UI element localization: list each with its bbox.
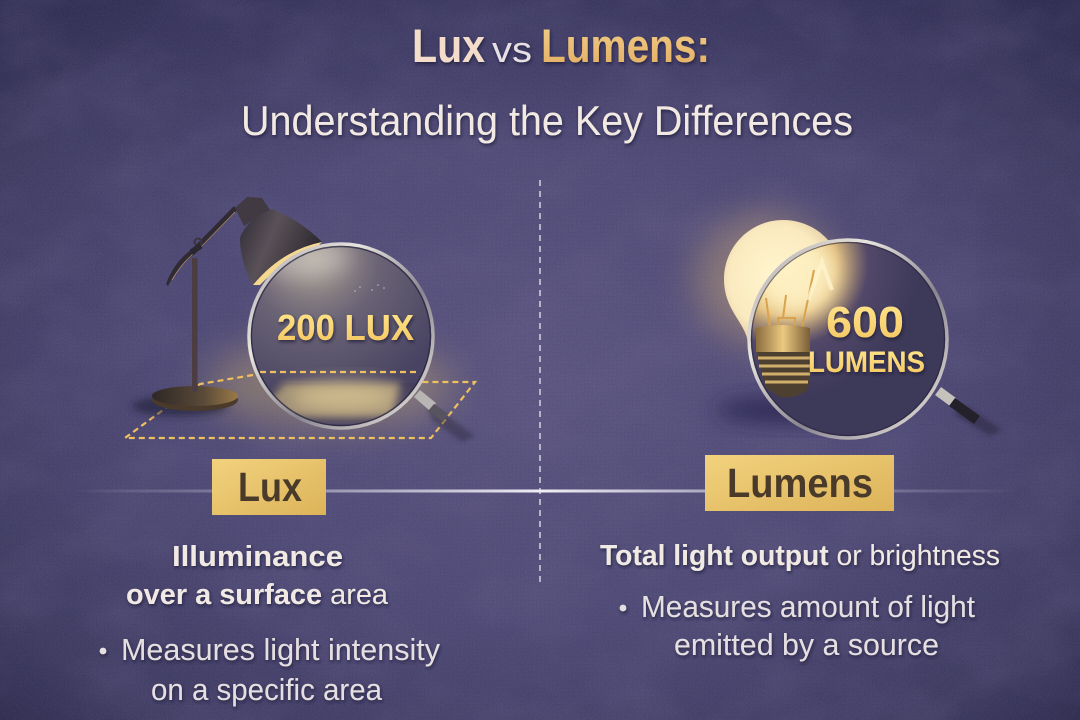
lumens reading: LUMENS (808, 346, 925, 379)
magnifier lens (250, 245, 432, 427)
title: Lumens: (541, 19, 710, 72)
lux description: over a surface area (126, 579, 389, 611)
lumens bullet: emitted by a source (674, 627, 939, 662)
ring inner edge (252, 246, 430, 426)
ring inner edge (752, 242, 944, 436)
magnifier handle (935, 387, 1002, 436)
lumens illustration: bulb with magnifier (695, 215, 1002, 438)
floor shadow (715, 396, 885, 424)
lens inner surface (260, 247, 416, 424)
lumens bullet: Measures amount of light (641, 589, 975, 624)
lux bullet: on a specific area (151, 672, 383, 707)
surface glow (205, 343, 455, 427)
lux description (126, 541, 389, 611)
lux label: Lux (238, 464, 302, 510)
glass bulb (724, 220, 843, 350)
title: Lux (412, 19, 485, 72)
horizontal divider (70, 490, 1015, 492)
bulb glow (695, 215, 835, 345)
lumens label: Lumens (727, 460, 873, 506)
magnifier ring (249, 244, 433, 428)
lux bullet: Measures light intensity (121, 632, 440, 667)
dashed surface area (125, 375, 475, 438)
title: vs (492, 29, 532, 70)
magnifier ring (749, 240, 947, 438)
desk lamp (132, 197, 322, 416)
lumens bullet (620, 589, 975, 662)
subtitle: Understanding the Key Differences (241, 97, 853, 144)
vertical dashed divider (539, 180, 541, 582)
lux illustration: lamp with magnifier (125, 197, 475, 442)
lux label (212, 459, 326, 515)
lens inner bulb (753, 235, 837, 397)
magnifier handle (414, 390, 475, 442)
lux bullet (100, 632, 440, 707)
600 reading: 600 (826, 298, 904, 347)
magnifier lens (749, 240, 947, 438)
lumens description: Total light output or brightness (600, 540, 1000, 572)
lumens label (705, 455, 894, 511)
lux description: Illuminance (172, 541, 343, 573)
200 lux reading: 200 LUX (277, 307, 414, 348)
title (412, 19, 710, 72)
